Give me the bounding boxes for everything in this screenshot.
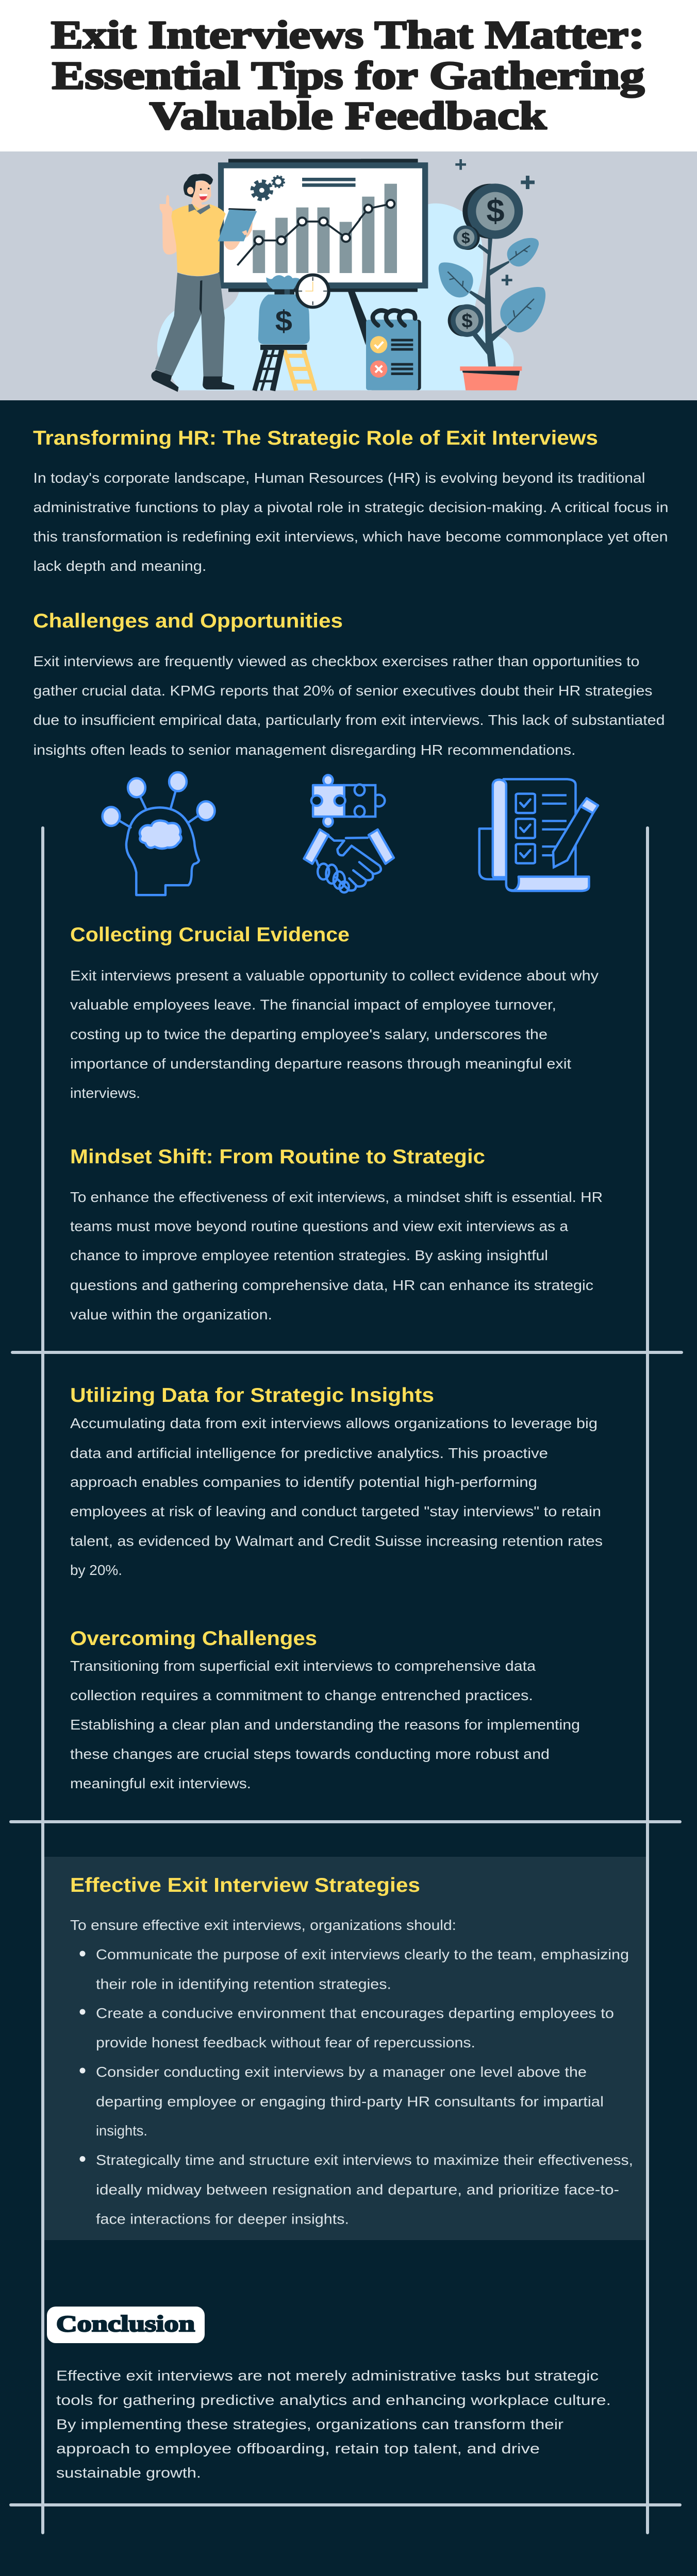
section: Conclusion [47, 2307, 611, 2481]
coins: $ [461, 310, 473, 332]
paragraph: data and artificial intelligence for predictive analytics. This proactive [70, 1445, 548, 1461]
heading: Collecting Crucial Evidence [70, 924, 350, 946]
leaves [439, 238, 545, 332]
conclusion badge [47, 2307, 205, 2343]
icon: checklist scroll with pencil [479, 779, 598, 891]
presenter figure [151, 174, 257, 392]
paragraph: talent, as evidenced by Walmart and Credit Suisse increasing retention rates [70, 1533, 603, 1549]
paragraph: costing up to twice the departing employee's salary, underscores the [70, 1026, 547, 1042]
section: Mindset Shift [70, 1146, 603, 1323]
coins [448, 183, 523, 337]
frame: vertical and horizontal rules [9, 826, 683, 2534]
shirt [171, 205, 226, 276]
section: Challenges and Opportunities [33, 610, 665, 758]
collar [189, 204, 210, 214]
paragraph: lack depth and meaning. [33, 558, 206, 574]
light blue backdrop [361, 204, 514, 391]
raised arm [160, 195, 177, 255]
paragraph: chance to improve employee retention strategies. By asking insightful [70, 1247, 548, 1263]
title: Exit Interviews That Matter: [51, 13, 644, 57]
paragraph: approach enables companies to identify potential high-performing [70, 1474, 537, 1490]
paragraph: this transformation is redefining exit interviews, which have become commonplace yet often [33, 529, 668, 545]
heading: Utilizing Data for Strategic Insights [70, 1384, 434, 1406]
paragraph: Effective exit interviews are not merely administrative tasks but strategic [56, 2368, 599, 2383]
money bag [258, 275, 310, 344]
hero illustration band [0, 151, 697, 400]
bullet: communicate purpose: Communicate the purpose of exit interviews clearly to the team, emphasizing [96, 1946, 629, 1962]
paragraph [70, 1415, 603, 1578]
paragraph: insights often leads to senior management disregarding HR recommendations. [33, 742, 575, 758]
paragraph: due to insufficient empirical data, particularly from exit interviews. This lack of substantiated [33, 712, 665, 728]
bullet: manager or consultant: departing employee or engaging third-party HR consultants for impartial [96, 2094, 604, 2109]
paragraph: Establishing a clear plan and understanding the reasons for implementing [70, 1717, 580, 1733]
ladder stool [255, 345, 315, 391]
paragraph [33, 470, 668, 574]
money plant [439, 159, 545, 391]
bullet: communicate purpose [79, 1946, 629, 1992]
section: Utilizing Data [70, 1384, 603, 1578]
neck and face [189, 179, 211, 209]
bullet: conducive environment: provide honest feedback without fear of repercussions. [96, 2035, 475, 2050]
paragraph: To enhance the effectiveness of exit interviews, a mindset shift is essential. HR [70, 1189, 603, 1205]
board right edge [359, 159, 428, 292]
clock [297, 275, 329, 307]
paragraph: teams must move beyond routine questions and view exit interviews as a [70, 1218, 568, 1234]
paragraph: By implementing these strategies, organizations can transform their [56, 2416, 563, 2432]
title: Essential Tips for Gathering [52, 54, 644, 97]
icon: puzzle and handshake [304, 775, 394, 892]
sparkle plus marks [455, 159, 535, 285]
header: white title band [0, 0, 697, 151]
bullet: timing and structure [79, 2152, 633, 2227]
paragraph: approach to employee offboarding, retain top talent, and drive [56, 2441, 540, 2456]
tablet and hands [218, 208, 257, 250]
paragraph: Exit interviews present a valuable opportunity to collect evidence about why [70, 968, 599, 984]
bullet: timing and structure: ideally midway between resignation and departure, and prioritize face-to- [96, 2181, 619, 2198]
notepad [366, 311, 421, 390]
panel: Effective Exit Interview Strategies [44, 1857, 646, 2240]
paragraph: importance of understanding departure reasons through meaningful exit [70, 1056, 571, 1072]
paragraph: these changes are crucial steps towards conducting more robust and [70, 1746, 550, 1762]
heading: Transforming HR: The Strategic Role of Exit Interviews [33, 427, 598, 449]
heading: Challenges and Opportunities [33, 610, 343, 632]
paragraph: interviews. [70, 1085, 140, 1101]
paragraph: In today's corporate landscape, Human Resources (HR) is evolving beyond its traditional [33, 470, 645, 486]
heading: Overcoming Challenges [70, 1628, 317, 1650]
paragraph [56, 2368, 611, 2481]
paragraph: valuable employees leave. The financial impact of employee turnover, [70, 996, 556, 1013]
bullet: timing and structure: face interactions for deeper insights. [96, 2211, 349, 2227]
board stand leg [348, 292, 368, 345]
paragraph: by 20%. [70, 1562, 122, 1578]
bullet: conducive environment: Create a conducive environment that encourages departing employees to [96, 2005, 614, 2021]
light blue backdrop [157, 291, 412, 391]
icon: head with brain network [103, 772, 215, 895]
paragraph: Exit interviews are frequently viewed as checkbox exercises rather than opportunities to [33, 653, 639, 669]
paragraph [33, 653, 665, 758]
conclusion badge: Conclusion [56, 2311, 195, 2336]
section: Transforming HR [33, 427, 668, 574]
paragraph [70, 1189, 603, 1323]
intro line: To ensure effective exit interviews, organizations should: [70, 1917, 456, 1933]
paragraph [70, 1658, 580, 1791]
paragraph: value within the organization. [70, 1307, 272, 1323]
section: Overcoming Challenges [70, 1628, 580, 1791]
bullet: timing and structure: Strategically time and structure exit interviews to maximize their effectiveness, [96, 2152, 633, 2168]
bar and line chart on board [237, 184, 397, 273]
flower pot [460, 366, 522, 391]
bullet: manager or consultant [79, 2064, 604, 2139]
bullet: manager or consultant: insights. [96, 2123, 147, 2139]
coins: $ [461, 230, 470, 247]
title [51, 13, 644, 138]
paragraph: collection requires a commitment to change entrenched practices. [70, 1687, 533, 1703]
icon row [103, 772, 598, 895]
bullet: communicate purpose: their role in identifying retention strategies. [96, 1976, 391, 1992]
stem and branches [469, 237, 509, 367]
presentation board [218, 159, 428, 292]
bullet: conducive environment [79, 2005, 614, 2050]
heading: Effective Exit Interview Strategies [70, 1874, 420, 1896]
paragraph: tools for gathering predictive analytics and enhancing workplace culture. [56, 2392, 611, 2408]
paragraph: employees at risk of leaving and conduct targeted "stay interviews" to retain [70, 1503, 601, 1519]
coins: $ [486, 193, 505, 229]
paragraph: Accumulating data from exit interviews allows organizations to leverage big [70, 1415, 598, 1431]
paragraph: questions and gathering comprehensive data, HR can enhance its strategic [70, 1277, 593, 1293]
paragraph: administrative functions to play a pivotal role in strategic decision-making. A critical focus in [33, 499, 668, 515]
title: Valuable Feedback [150, 94, 547, 138]
paragraph: Transitioning from superficial exit interviews to comprehensive data [70, 1658, 536, 1674]
illustration: presenter, board, money bag and clock [151, 159, 428, 392]
heading: Mindset Shift: From Routine to Strategic [70, 1146, 485, 1168]
paragraph: sustainable growth. [56, 2465, 201, 2481]
illustration: notepad and money plant [348, 159, 545, 391]
icon: gears [253, 176, 284, 199]
paragraph [70, 968, 599, 1101]
hair [184, 174, 213, 197]
paragraph: gather crucial data. KPMG reports that 20% of senior executives doubt their HR strategies [33, 683, 653, 699]
money bag: $ [275, 305, 292, 337]
trousers and shoes [151, 273, 234, 392]
bullet: manager or consultant: Consider conducting exit interviews by a manager one level above the [96, 2064, 587, 2080]
section: Collecting Crucial Evidence [70, 924, 599, 1101]
paragraph: meaningful exit interviews. [70, 1775, 251, 1791]
